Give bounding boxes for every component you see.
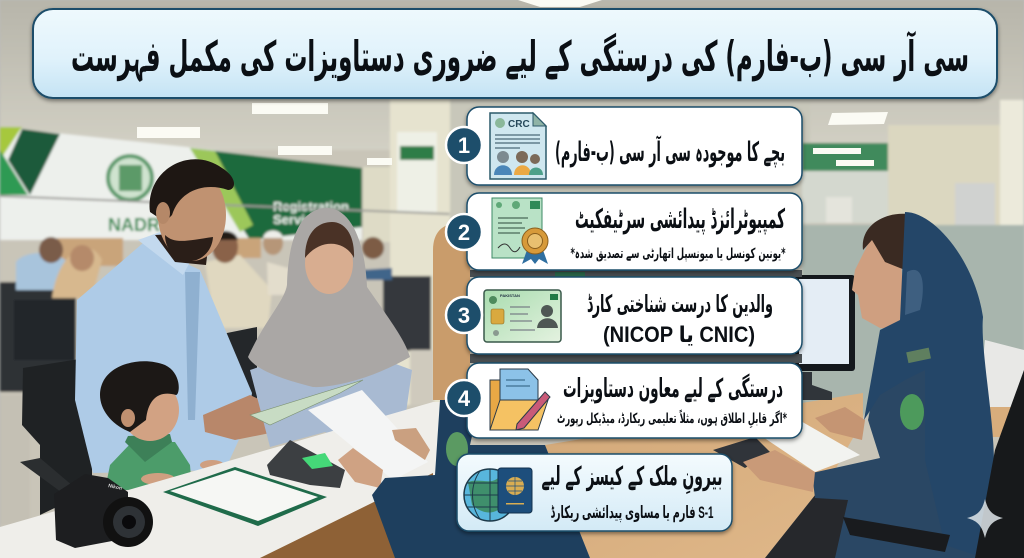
wood pillar xyxy=(433,224,470,400)
card 4: supporting documents xyxy=(467,363,802,438)
dark strip under cards xyxy=(470,270,802,363)
number badge 1 xyxy=(446,127,482,163)
icon: ID card xyxy=(484,290,561,342)
fingerprint scanner xyxy=(267,440,345,488)
icon: certificate with seal xyxy=(492,198,548,264)
number badge 3: 3 xyxy=(458,303,470,328)
staff woman xyxy=(743,212,995,558)
number badge 4 xyxy=(446,380,482,416)
icon: globe and passport xyxy=(464,468,532,521)
title banner xyxy=(33,9,997,98)
icon: folder with pencil xyxy=(490,369,550,430)
icon: ID card: PAKISTAN xyxy=(500,293,520,298)
counter xyxy=(0,402,450,558)
card 4: supporting documents: *اگر قابلِ اطلاق ہوں، مثلاً تعلیمی ریکارڈ، میڈیکل رپورٹ xyxy=(557,409,787,428)
keyboard and paper xyxy=(713,412,860,472)
card 5: overseas cases xyxy=(457,454,732,531)
monitor xyxy=(795,275,855,400)
card 2: birth certificate: *یونین کونسل یا میونسپل اتھارٹی سے تصدیق شدہ* xyxy=(570,246,786,262)
card 2: birth certificate xyxy=(467,193,802,270)
number badge 4: 4 xyxy=(458,386,471,411)
number badge 1: 1 xyxy=(458,133,470,158)
background: office interior: NADRA xyxy=(108,215,173,235)
icon: CRC document: CRC xyxy=(508,119,530,130)
woman xyxy=(248,208,412,447)
card 3: parents' ID card: والدین کا درست شناختی کارڈ xyxy=(587,290,773,318)
number badge 2: 2 xyxy=(458,220,470,245)
camera: Nikon xyxy=(108,483,122,492)
office chair xyxy=(975,370,1024,558)
card 2: birth certificate: کمپیوٹرائزڈ پیدائشی سرٹیفکیٹ xyxy=(575,204,785,235)
watermark star xyxy=(967,499,1003,538)
under-desk shadow xyxy=(765,470,860,558)
background: office interior: Service xyxy=(273,212,319,227)
number badge 3 xyxy=(446,297,482,333)
card 3: parents' ID card xyxy=(467,277,802,354)
folder held by man xyxy=(250,380,363,425)
icon: CRC document xyxy=(490,113,546,179)
card 5: overseas cases: S-1 فارم یا مساوی پیدائشی ریکارڈ xyxy=(550,503,714,523)
card 4: supporting documents: درستگی کے لیے معاون دستاویزات xyxy=(563,373,783,404)
card 5: overseas cases: بیرونِ ملک کے کیسز کے لیے xyxy=(542,462,722,495)
card 3: parents' ID card: (CNIC یا NICOP) xyxy=(603,322,755,347)
staff desk xyxy=(545,393,863,558)
staff member foreground xyxy=(338,400,590,558)
camera xyxy=(54,474,153,548)
man xyxy=(75,159,292,473)
paper held by staff xyxy=(308,390,428,480)
background: office interior: Registration xyxy=(273,199,349,214)
boy xyxy=(100,361,224,490)
number badge 2 xyxy=(446,214,482,250)
ceiling lights xyxy=(137,0,888,166)
desk right part xyxy=(990,407,1024,437)
clipboard xyxy=(163,467,327,526)
black chairs xyxy=(20,327,257,515)
stack of documents xyxy=(982,340,1024,407)
card 1: current CRC xyxy=(467,107,802,185)
